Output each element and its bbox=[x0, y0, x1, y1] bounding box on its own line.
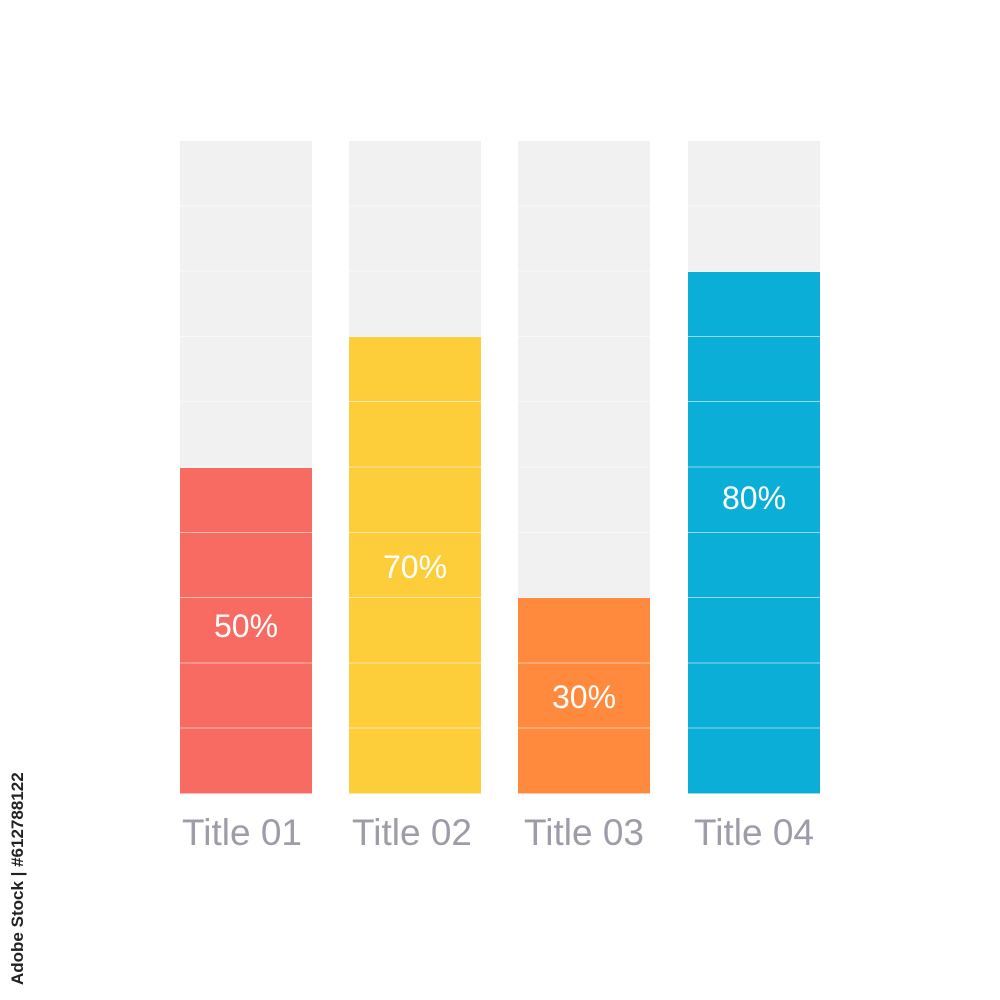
bar: Title 04 bbox=[688, 141, 820, 794]
value 80%: 80% bbox=[722, 480, 786, 516]
label Title 04: Title 04 bbox=[694, 812, 814, 853]
watermark id: Adobe Stock | #612788122 bbox=[8, 772, 27, 985]
value 70%: 70% bbox=[383, 549, 447, 585]
value 30%: 30% bbox=[552, 679, 616, 715]
label Title 01: Title 01 bbox=[182, 812, 302, 853]
bar: Title 03 bbox=[518, 141, 650, 794]
bar: Title 02 bbox=[349, 141, 481, 794]
label Title 02: Title 02 bbox=[352, 812, 472, 853]
bar: Title 01 bbox=[180, 141, 312, 794]
label Title 03: Title 03 bbox=[524, 812, 644, 853]
value 50%: 50% bbox=[214, 608, 278, 644]
